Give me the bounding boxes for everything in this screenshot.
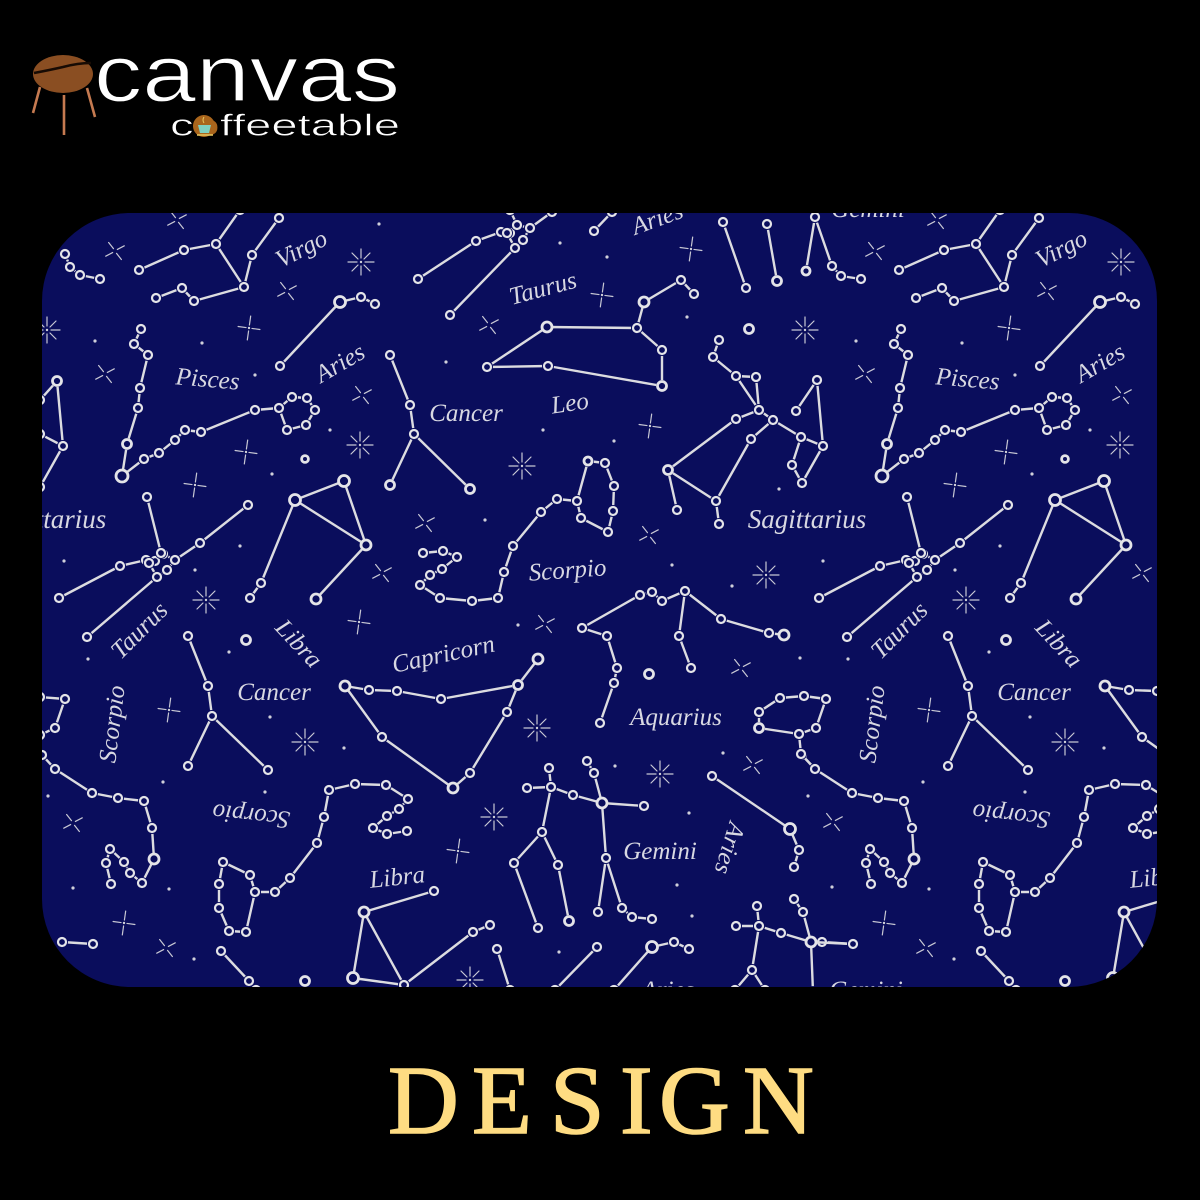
icon: coffee bean table xyxy=(33,55,95,135)
constellation: Gemini xyxy=(514,761,652,928)
label: Taurus: Taurus xyxy=(106,597,173,664)
label: Libra right: Libra xyxy=(1029,614,1087,673)
constellation: Taurus top xyxy=(418,210,612,315)
label: Scorpio vertical: Scorpio xyxy=(94,684,131,764)
label: Scorpio inverted: Scorpio xyxy=(211,798,291,833)
constellation fragments at left edge xyxy=(40,254,100,735)
constellation: Aries bottom xyxy=(555,942,689,990)
logo word: canvas: canvas xyxy=(94,29,400,118)
label: Libra: Libra xyxy=(269,614,327,673)
logo word: coffeetable: c o ffeetable xyxy=(170,108,400,142)
constellation: Gemini bottom xyxy=(735,899,853,992)
repeated constellation pattern, left tile xyxy=(42,210,543,990)
label: Cancer: Cancer xyxy=(429,400,503,427)
repeated constellation pattern, right tile xyxy=(800,213,1157,987)
label: Gemini top clipped: Gemini xyxy=(831,196,905,223)
constellation: Aries lower xyxy=(712,776,799,867)
label: Virgo: Virgo xyxy=(271,225,332,274)
logo: canvas coffeetable xyxy=(33,29,400,142)
label: Scorpio: Scorpio xyxy=(528,554,607,587)
label: Aries right: Aries xyxy=(1069,339,1130,389)
decorative dots xyxy=(46,222,1141,961)
label: Virgo right: Virgo xyxy=(1031,225,1092,274)
constellation: Gemini top xyxy=(723,217,861,288)
constellation: Scorpio centre xyxy=(420,457,614,601)
label: Sagittarius: Sagittarius xyxy=(748,504,866,534)
heading: DESIGN: DESIGN xyxy=(388,1047,814,1155)
label: Aquarius: Aquarius xyxy=(628,704,722,731)
label: Libra lower right: Libra xyxy=(1127,861,1186,894)
label: Cancer lower: Cancer xyxy=(237,679,311,706)
label: Gemini: Gemini xyxy=(623,838,697,865)
label: Pisces: Pisces xyxy=(174,363,241,396)
label: Gemini bottom clipped: Gemini xyxy=(829,977,903,1004)
label: Scorpio inverted right: Scorpio xyxy=(971,798,1051,833)
constellation: Leo xyxy=(487,280,754,390)
panel: constellation mat xyxy=(42,213,1157,987)
label: Scorpio vertical right: Scorpio xyxy=(854,684,891,764)
constellation: Sagittarius xyxy=(664,340,823,524)
label: Aries sideways: Aries xyxy=(709,817,750,877)
label: Cancer lower right: Cancer xyxy=(997,679,1071,706)
labels xyxy=(0,196,1186,1004)
label: Taurus right: Taurus xyxy=(866,597,933,664)
decorative sparkles xyxy=(34,211,1151,993)
label: Taurus top: Taurus xyxy=(506,267,580,311)
constellation: Aquarius xyxy=(582,591,789,723)
label: Pisces right: Pisces xyxy=(934,363,1001,396)
label: Leo: Leo xyxy=(549,388,590,420)
label: Aries top clipped: Aries xyxy=(626,197,687,241)
label: Aries bottom clipped: Aries xyxy=(640,977,694,1004)
label: Libra lower: Libra xyxy=(367,861,426,894)
label: Aries: Aries xyxy=(309,339,370,389)
icon: coffee cup xyxy=(193,115,215,137)
constellation: Scorpio ring xyxy=(754,696,826,769)
constellation: Cancer xyxy=(386,355,474,494)
label: Capricorn: Capricorn xyxy=(390,631,497,679)
